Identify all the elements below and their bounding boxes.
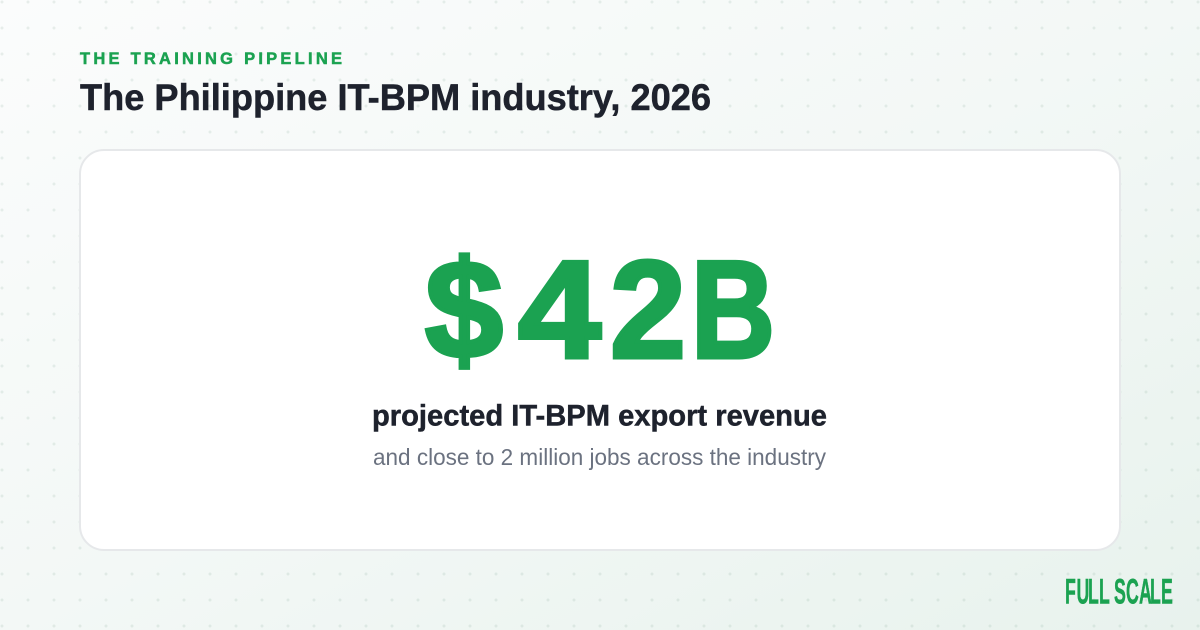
big number: $42B: 2 [610,232,686,388]
panel: main stat card [80,150,1120,550]
stat subtext: and close to 2 million jobs across the industry [373,444,826,470]
big number: $42B: B [691,232,775,388]
title: The Philippine IT-BPM industry, 2026 [80,77,711,118]
big number: $42B: 4 [518,232,601,388]
big number: $42B: $ [425,232,503,388]
logo: Full Scale: FULL SCALE [1065,572,1173,611]
stat label: projected IT-BPM export revenue [372,400,827,432]
big number: $42B [425,232,775,388]
eyebrow: the training pipeline: THE TRAINING PIPELINE [80,50,342,68]
